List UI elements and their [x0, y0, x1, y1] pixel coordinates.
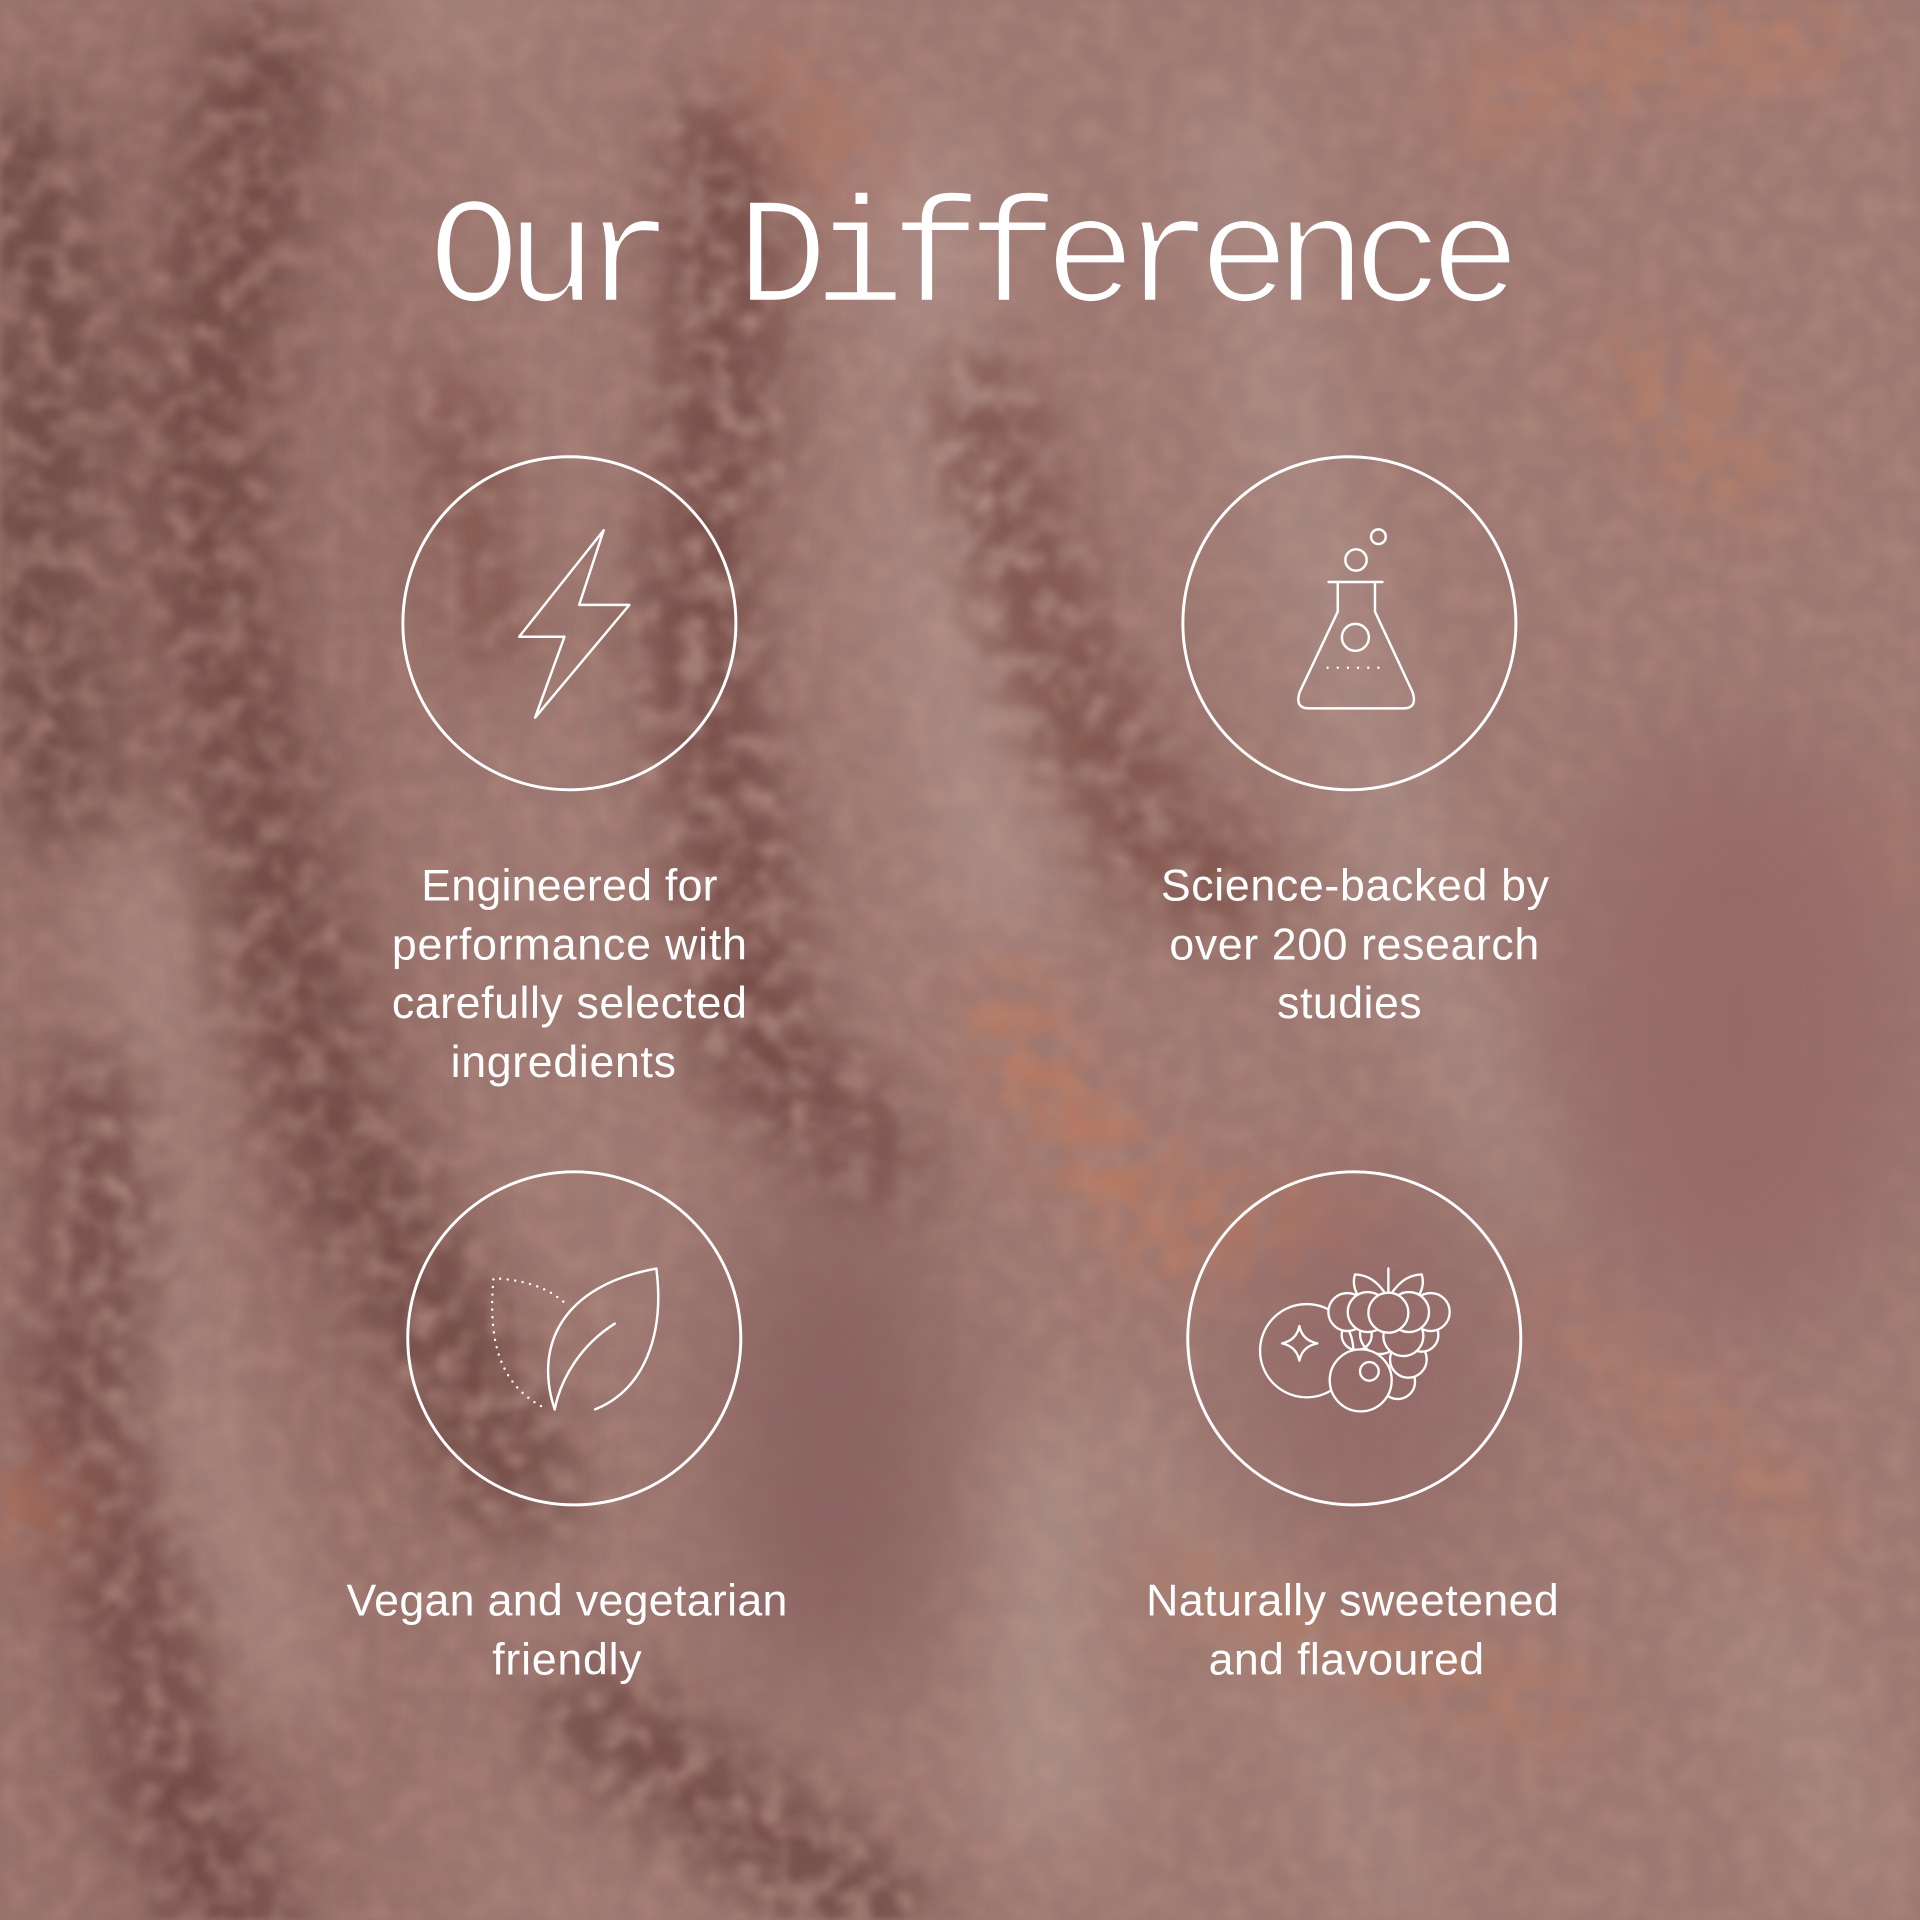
icon: leaf: [492, 1269, 658, 1409]
icon ring: natural: [1188, 1172, 1521, 1505]
text: natural: and flavoured: [1209, 1635, 1484, 1684]
text: vegan: Vegan and vegetarian: [347, 1577, 787, 1626]
text: performance: Engineered for: [421, 862, 718, 911]
text: science: [1161, 862, 1550, 1028]
text: natural: [1146, 1577, 1559, 1684]
text: performance: performance with: [392, 920, 747, 969]
icon ring: performance: [403, 457, 736, 790]
title: Our Difference: [429, 175, 1521, 347]
text: performance: [392, 862, 747, 1087]
text: performance: ingredients: [451, 1038, 676, 1087]
icon ring: vegan: [408, 1172, 741, 1505]
text: science: Science-backed by: [1161, 862, 1550, 911]
icon: berries: [1260, 1268, 1450, 1411]
panel: natural: [1146, 1172, 1559, 1684]
text: science: over 200 research: [1169, 920, 1539, 969]
icon ring: science: [1183, 457, 1516, 790]
panel: performance: [392, 457, 747, 1087]
panel: vegan: [347, 1172, 787, 1684]
icon: flask: [1298, 529, 1414, 708]
text: performance: carefully selected: [392, 979, 747, 1028]
smooth areas: [710, 722, 1920, 1714]
icon: lightning bolt: [519, 530, 629, 718]
text: vegan: friendly: [492, 1635, 642, 1684]
panel: science: [1161, 457, 1550, 1028]
text: science: studies: [1277, 979, 1422, 1028]
text: vegan: [347, 1577, 787, 1684]
text: natural: Naturally sweetened: [1146, 1577, 1559, 1626]
